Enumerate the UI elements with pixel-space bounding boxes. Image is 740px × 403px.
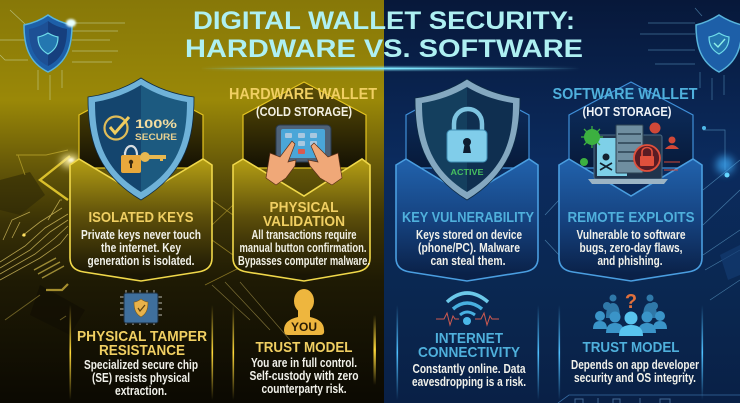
background: software side bbox=[384, 0, 740, 403]
heading: PHYSICAL TAMPER bbox=[77, 328, 207, 345]
description: counterparty risk. bbox=[262, 381, 346, 396]
description: All transactions require bbox=[252, 228, 357, 242]
title bbox=[185, 7, 583, 63]
description: Self-custody with zero bbox=[250, 368, 359, 383]
heading: software wallet: SOFTWARE WALLET bbox=[552, 86, 698, 103]
icon: active padlock shield bbox=[415, 79, 520, 200]
icon: 100% secure shield: 100% bbox=[135, 117, 177, 131]
heading bbox=[418, 330, 520, 361]
card back bbox=[79, 82, 203, 168]
background: hardware side bbox=[0, 0, 384, 403]
description bbox=[250, 355, 359, 396]
icon: small shield top right bbox=[640, 8, 740, 100]
heading: ISOLATED KEYS bbox=[88, 209, 194, 226]
heading: KEY VULNERABILITY bbox=[402, 209, 534, 226]
heading bbox=[263, 199, 345, 230]
description: Depends on app developer bbox=[571, 357, 699, 372]
description: Constantly online. Data bbox=[412, 361, 526, 376]
description: manual button confirmation. bbox=[240, 241, 366, 255]
card back bbox=[569, 82, 693, 168]
card back bbox=[406, 82, 529, 168]
heading: RESISTANCE bbox=[99, 342, 185, 359]
description: (SE) resists physical bbox=[92, 370, 190, 385]
section: physical tamper resistance bbox=[77, 290, 207, 398]
section: trust model, software bbox=[571, 291, 699, 385]
heading: TRUST MODEL bbox=[582, 339, 680, 356]
description: security and OS integrity. bbox=[574, 370, 696, 385]
background circuit: software side bbox=[545, 126, 740, 300]
description bbox=[412, 361, 526, 389]
card back bbox=[243, 82, 366, 168]
description bbox=[576, 227, 686, 268]
title: HARDWARE VS. SOFTWARE bbox=[185, 35, 583, 63]
card pocket bbox=[396, 159, 538, 281]
card pocket bbox=[233, 159, 370, 281]
heading: VALIDATION bbox=[263, 213, 345, 230]
description: bugs, zero-day flaws, bbox=[580, 240, 682, 255]
description: Bypasses computer malware. bbox=[238, 254, 370, 268]
description: can steal them. bbox=[430, 253, 506, 268]
heading: TRUST MODEL bbox=[256, 339, 352, 356]
section: internet connectivity bbox=[412, 293, 526, 389]
card pocket bbox=[70, 159, 212, 281]
description bbox=[571, 357, 699, 385]
description: Vulnerable to software bbox=[576, 227, 686, 242]
background circuit: hardware side bbox=[0, 150, 290, 340]
icon: small shield top left bbox=[0, 10, 125, 100]
icon: 100% secure shield bbox=[88, 78, 194, 200]
panel: isolated keys bbox=[70, 78, 212, 281]
subheading: hot storage: (HOT STORAGE) bbox=[582, 104, 672, 119]
icon: hands on keypad bbox=[266, 125, 342, 185]
subheading: cold storage: (COLD STORAGE) bbox=[256, 104, 352, 119]
description: generation is isolated. bbox=[88, 253, 194, 268]
heading: INTERNET bbox=[435, 330, 503, 347]
description: extraction. bbox=[115, 383, 167, 398]
description: Private keys never touch bbox=[81, 227, 201, 242]
icon: 100% secure shield: SECURE bbox=[135, 132, 177, 142]
description bbox=[416, 227, 522, 268]
title: DIGITAL WALLET SECURITY: bbox=[193, 7, 575, 35]
title glow divider bbox=[200, 67, 580, 70]
description: the internet. Key bbox=[101, 240, 182, 255]
bottom right HUD strip bbox=[558, 395, 740, 403]
heading: hardware wallet: HARDWARE WALLET bbox=[229, 86, 377, 103]
heading: CONNECTIVITY bbox=[418, 344, 520, 361]
panel: physical validation bbox=[229, 82, 377, 281]
icon: you silhouette: YOU bbox=[291, 320, 317, 334]
icon: crowd with question mark: ? bbox=[625, 291, 637, 313]
icon: active padlock shield: ACTIVE bbox=[450, 168, 484, 177]
heading: PHYSICAL bbox=[270, 199, 338, 216]
section: trust model, hardware bbox=[250, 289, 359, 396]
panel: remote exploits bbox=[552, 82, 702, 281]
description bbox=[81, 227, 201, 268]
heading bbox=[77, 328, 207, 359]
description bbox=[238, 228, 370, 268]
icon: secure chip bbox=[120, 290, 162, 325]
vertical glow accents bbox=[70, 305, 703, 400]
description: (phone/PC). Malware bbox=[418, 240, 520, 255]
icon: infected laptop and servers bbox=[580, 122, 680, 184]
icon: wifi with pulse bbox=[436, 293, 499, 325]
panel: key vulnerability bbox=[396, 79, 538, 281]
description: eavesdropping is a risk. bbox=[412, 374, 526, 389]
description: You are in full control. bbox=[251, 355, 357, 370]
description: and phishing. bbox=[598, 253, 662, 268]
description: Keys stored on device bbox=[416, 227, 522, 242]
card pocket bbox=[559, 159, 702, 281]
description bbox=[84, 357, 198, 398]
description: Specialized secure chip bbox=[84, 357, 198, 372]
heading: REMOTE EXPLOITS bbox=[568, 209, 694, 226]
